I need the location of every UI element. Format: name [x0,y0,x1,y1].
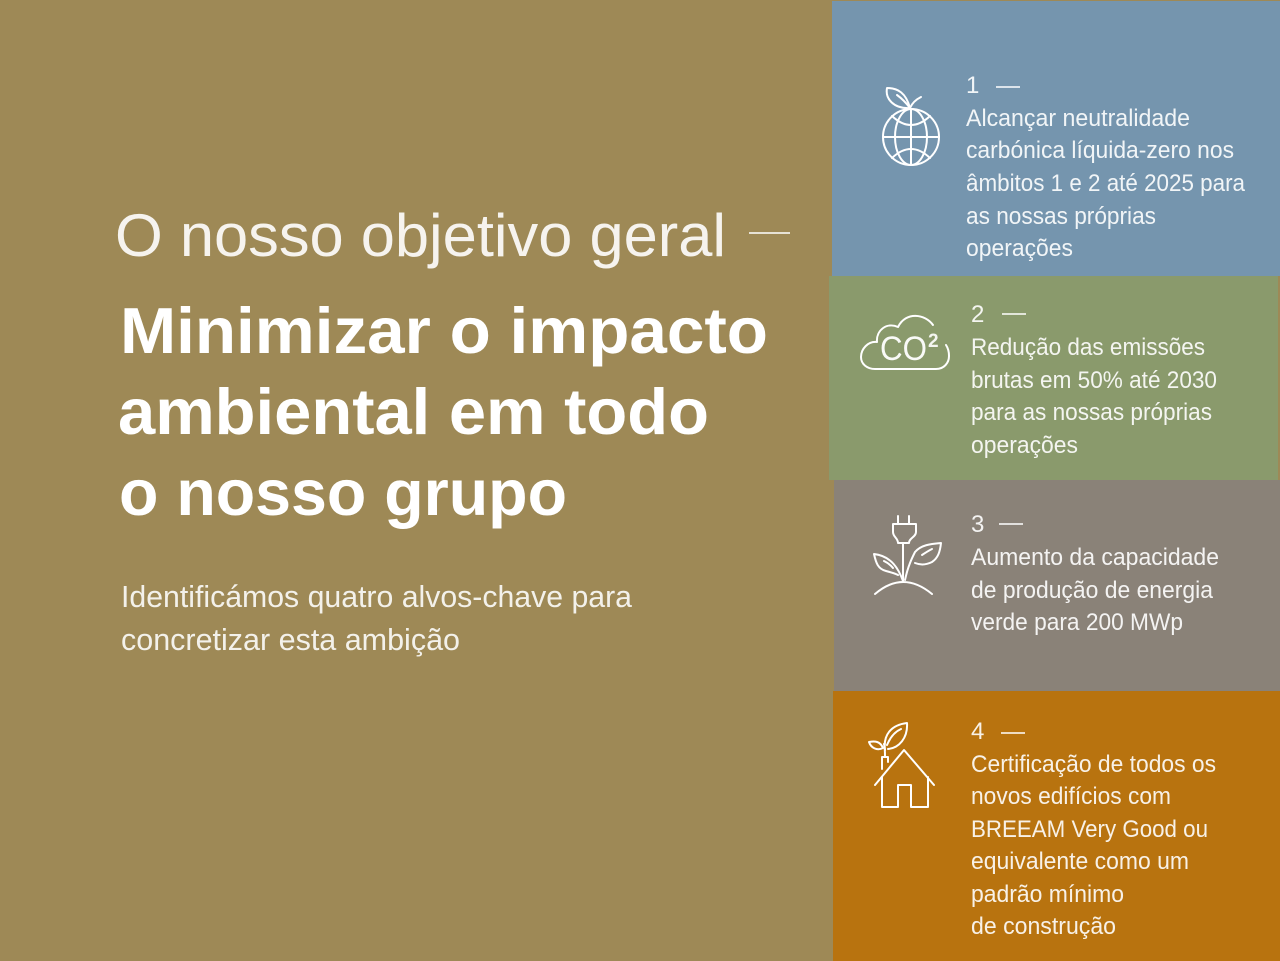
text: target 1: âmbitos 1 e 2 até 2025 para [966,170,1246,197]
text block: intro: concretizar esta ambição [121,622,460,657]
text: target 2: 2 [971,301,984,328]
panel: target 4 [833,691,1280,961]
text: target 1: operações [966,235,1073,262]
text: target 1: 1 [966,72,979,99]
text: target 2: brutas em 50% até 2030 [971,367,1217,394]
title: main goal: o nosso grupo [119,456,567,529]
title: main goal [118,294,768,529]
text: target 3: 3 [971,511,984,538]
panel: overall objective [115,202,790,657]
icon: plug plant [874,516,941,594]
text: target 3 [971,511,1219,636]
heading: overall objective: O nosso objetivo geral [115,202,726,269]
text: target 2 [971,301,1217,459]
text block: intro [121,579,633,657]
text: target 3: de produção de energia [971,577,1214,604]
text: target 2: para as nossas próprias [971,399,1212,426]
icon: globe with leaf [883,88,939,165]
text: target 1 [966,72,1246,262]
text: target 2: operações [971,432,1078,459]
icon: CO2 cloud: 2 [928,331,939,352]
text: target 4: equivalente como um [971,848,1189,875]
panel: target 1 [832,1,1280,276]
text: target 4: padrão mínimo [971,881,1124,908]
text: target 4: de construção [971,913,1116,940]
text: target 4 [971,718,1216,940]
text: target 4: Certificação de todos os [971,751,1216,778]
text: target 1: as nossas próprias [966,203,1156,230]
text: target 1: carbónica líquida-zero nos [966,137,1234,164]
text: target 3: verde para 200 MWp [971,609,1183,636]
title: main goal: Minimizar o impacto [120,294,768,367]
icon: CO2 cloud [861,316,949,369]
icon: house with leaves [869,723,934,807]
text block: intro: Identificámos quatro alvos-chave para [121,579,633,614]
text: target 4: 4 [971,718,984,745]
icon: CO2 cloud: CO [880,330,927,368]
text: target 3: Aumento da capacidade [971,544,1219,571]
title: main goal: ambiental em todo [118,375,709,448]
panel: target 2 [829,276,1278,480]
text: target 1: Alcançar neutralidade [966,105,1190,132]
panel: target 3 [834,480,1280,691]
text: target 4: novos edifícios com [971,783,1171,810]
text: target 4: BREEAM Very Good ou [971,816,1208,843]
text: target 2: Redução das emissões [971,334,1205,361]
